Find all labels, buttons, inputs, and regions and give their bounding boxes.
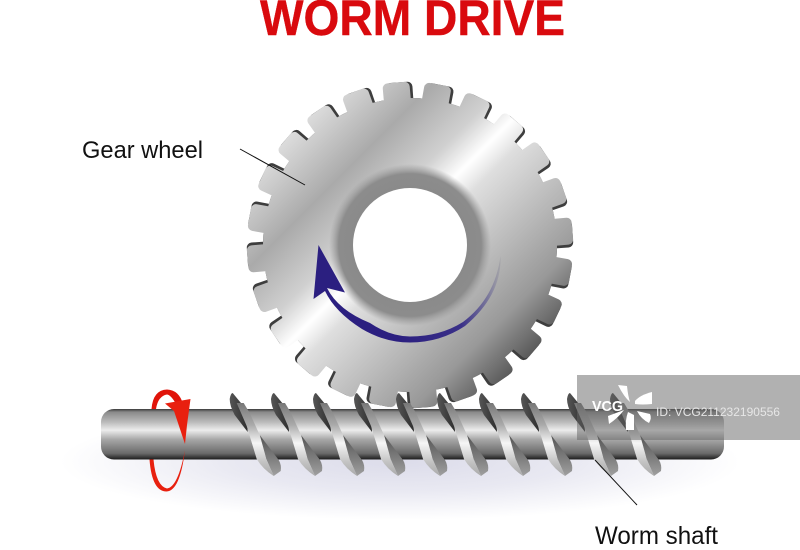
gear wheel <box>246 82 574 408</box>
rotation arrow: shaft <box>150 399 190 492</box>
rotation arrow: gear <box>314 245 501 342</box>
watermark VCG text: VCG <box>592 398 623 415</box>
gear hub ring <box>329 164 491 326</box>
floor shadow <box>60 404 740 520</box>
arrow head <box>165 399 190 444</box>
arrow lower arc <box>150 450 185 492</box>
watermark logo <box>608 385 652 430</box>
watermark <box>577 375 800 440</box>
red arrow back arc <box>152 390 183 409</box>
label: worm shaft: Worm shaft <box>595 522 718 550</box>
label: gear wheel: Gear wheel <box>82 137 203 164</box>
watermark id text: ID: VCG211232190556 <box>656 405 780 419</box>
watermark band <box>577 375 800 440</box>
gear body <box>246 82 574 408</box>
worm shaft <box>101 393 724 476</box>
gear tooth shadow <box>246 82 574 408</box>
gear centre hole <box>353 188 467 302</box>
shaft threads <box>230 393 661 476</box>
gear wheel leader line <box>240 149 305 185</box>
worm shaft leader line <box>595 460 637 505</box>
shaft body <box>101 409 724 460</box>
